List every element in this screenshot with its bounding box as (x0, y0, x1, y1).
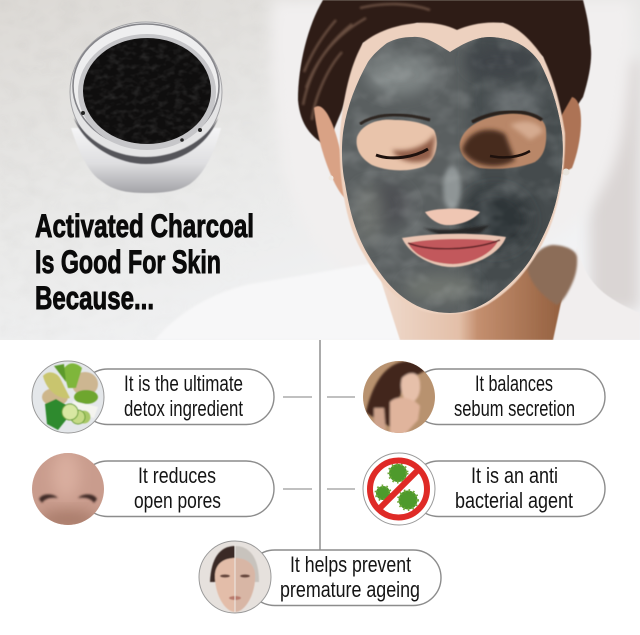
heading: Is Good For Skin (35, 244, 221, 280)
benefit: sebum (363, 361, 605, 434)
benefit: sebum: sebum secretion (454, 396, 575, 421)
icon: woman touching face (363, 361, 435, 434)
mask mottling (354, 46, 543, 301)
benefit: detox (32, 361, 274, 433)
icon: ageing face (199, 541, 271, 613)
lips (402, 234, 506, 267)
panel: hero photo (0, 0, 640, 340)
jar (70, 22, 222, 193)
benefit: ageing: It helps prevent (290, 552, 412, 577)
eyes (357, 113, 546, 170)
charcoal mask (342, 36, 563, 313)
charcoal powder (83, 38, 211, 144)
face skin (340, 22, 565, 314)
towel background (0, 0, 640, 340)
icon: nose (32, 451, 104, 530)
benefit: ageing (199, 541, 441, 613)
benefit: pores (32, 451, 274, 530)
benefit: ageing: premature ageing (280, 577, 420, 602)
benefit: detox: detox ingredient (124, 396, 244, 421)
benefit: antibacterial: It is an anti (471, 463, 558, 488)
eyebrows (360, 115, 430, 124)
icon: no bacteria sign (363, 453, 435, 525)
robe (161, 266, 380, 338)
pillow (270, 0, 633, 203)
neck (381, 264, 562, 340)
benefit: pores: It reduces (138, 463, 216, 488)
heading: Activated Charcoal (35, 208, 254, 244)
benefit: sebum: It balances (475, 371, 553, 396)
benefit: detox: It is the ultimate (124, 371, 243, 396)
eyelashes (376, 149, 428, 158)
benefit: antibacterial: bacterial agent (455, 488, 574, 513)
heading (35, 213, 253, 310)
benefit: pores: open pores (134, 488, 221, 513)
benefit: antibacterial (363, 453, 605, 525)
hair (298, 0, 591, 146)
heading: Because... (35, 280, 154, 316)
icon: salad bowl (32, 361, 104, 433)
ears (314, 106, 345, 198)
nose tip (425, 209, 480, 225)
central divider (283, 340, 355, 550)
